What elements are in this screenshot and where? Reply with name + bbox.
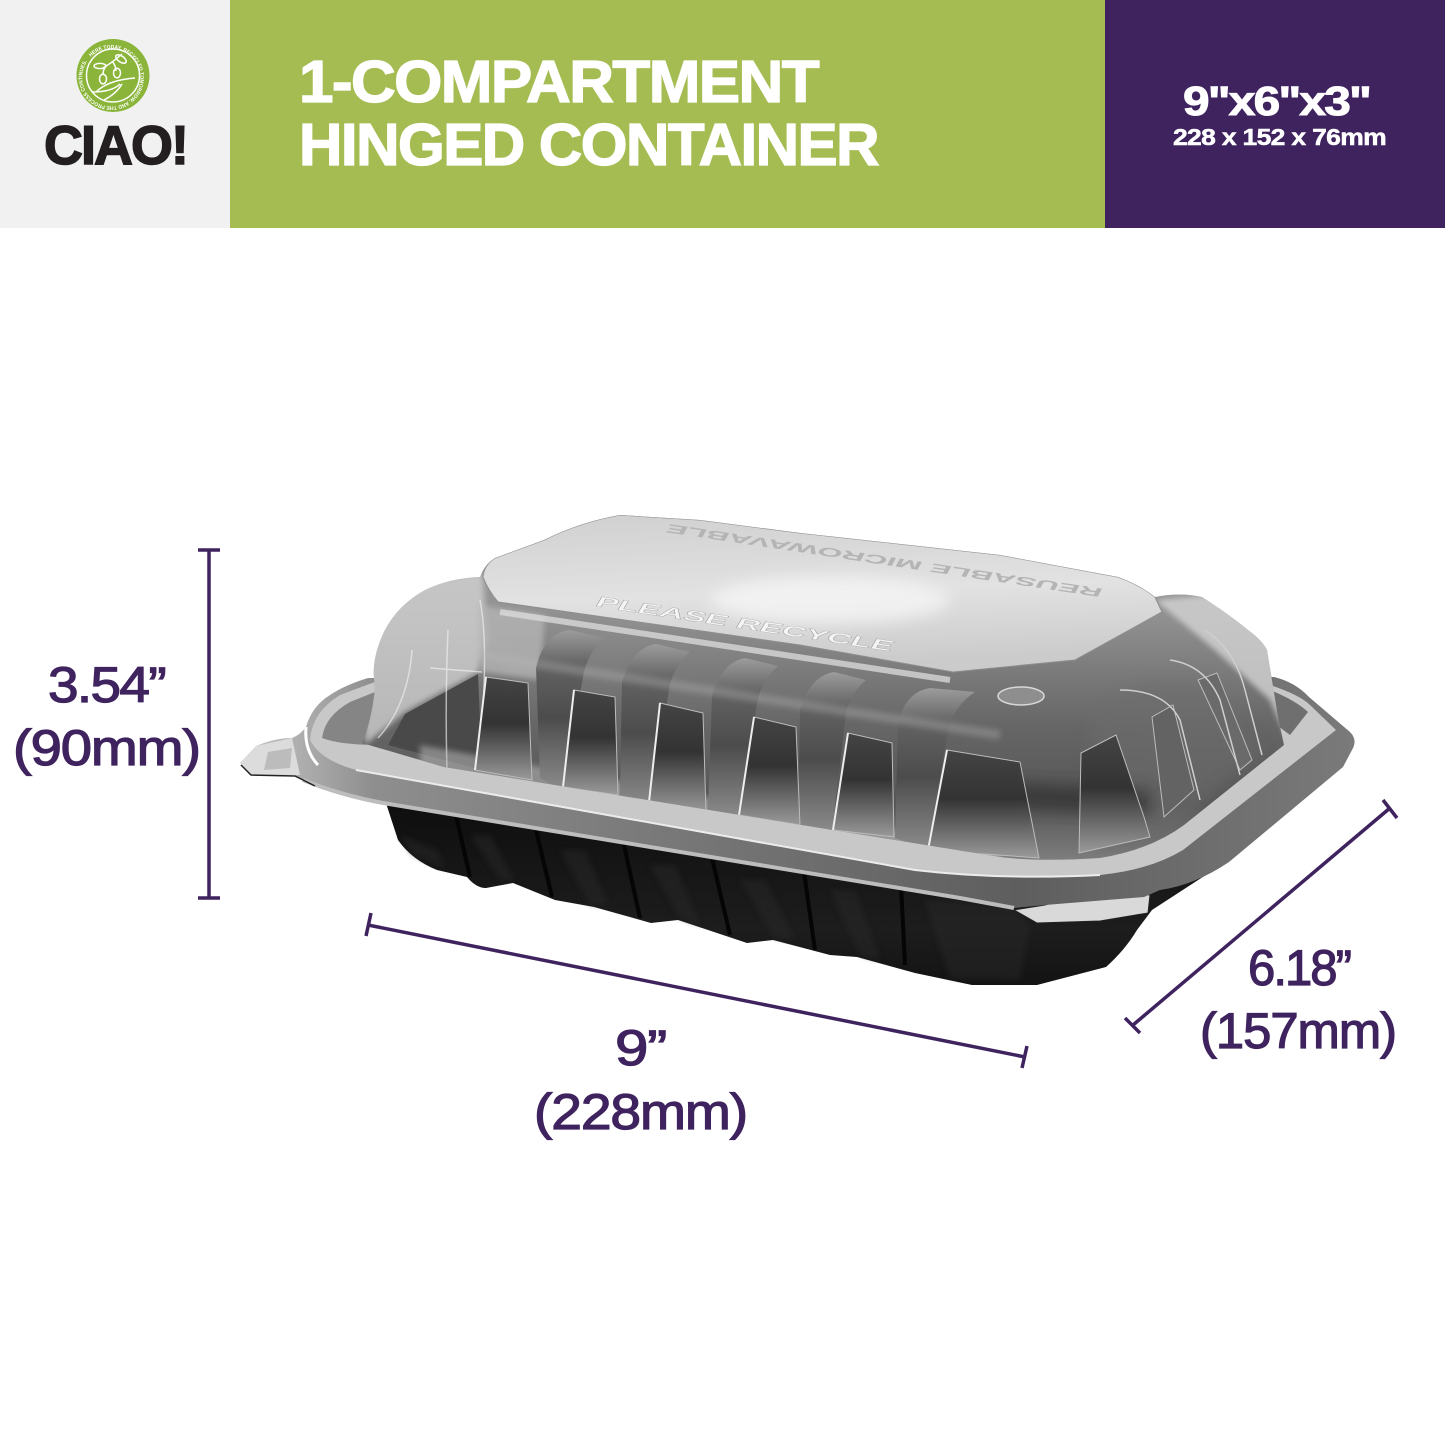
nominal size in inches: 9"x6"x3" <box>1183 78 1370 124</box>
width label millimetres: (157mm) <box>1200 1003 1396 1059</box>
logo wordmark: CIAO! <box>44 114 187 176</box>
soft reflection on plateau <box>710 576 950 624</box>
front right latch tab <box>1014 888 1150 923</box>
vent button <box>998 687 1044 705</box>
height bracket <box>198 550 220 898</box>
front shelf highlights <box>478 655 1000 735</box>
logo emblem: HERE TODAY, RECYCLED TOMORROW. AND THE PROCESS CONTINUES. <box>78 44 144 110</box>
embossed lid text: reusable microwavable: REUSABLE MICROWAVABLE <box>663 521 1105 599</box>
dimension: length <box>366 913 1027 1140</box>
header: logo panel <box>0 0 230 228</box>
top plateau <box>483 515 1162 672</box>
title line 1: 1-COMPARTMENT <box>299 49 820 115</box>
width bracket <box>1125 800 1397 1033</box>
front panels <box>475 673 1252 858</box>
left end highlights <box>360 572 488 745</box>
dimension: width <box>1125 800 1397 1059</box>
bright panel left edges <box>475 677 947 850</box>
length label inches: 9” <box>615 1020 666 1076</box>
front columns <box>536 630 975 850</box>
clear lid rim <box>240 677 1355 908</box>
right end ribs <box>1120 630 1262 800</box>
clear lid dome <box>350 510 1300 870</box>
right end highlights <box>1156 595 1282 734</box>
nominal size in millimetres: 228 x 152 x 76mm <box>1173 124 1386 150</box>
height label inches: 3.54” <box>48 657 165 713</box>
title line 2: HINGED CONTAINER <box>299 112 879 178</box>
product photo: hinged container <box>240 510 1355 985</box>
length label millimetres: (228mm) <box>534 1084 747 1140</box>
embossed lid text: please recycle: PLEASE RECYCLE <box>592 593 898 654</box>
width label inches: 6.18” <box>1248 940 1350 996</box>
dark midsection shadow <box>1024 778 1156 820</box>
height label millimetres: (90mm) <box>13 720 200 776</box>
black base tray <box>385 800 1232 985</box>
header: size panel <box>1105 0 1445 228</box>
length bracket <box>366 913 1027 1068</box>
dimension: height <box>13 550 220 898</box>
header: title panel <box>230 0 1105 228</box>
